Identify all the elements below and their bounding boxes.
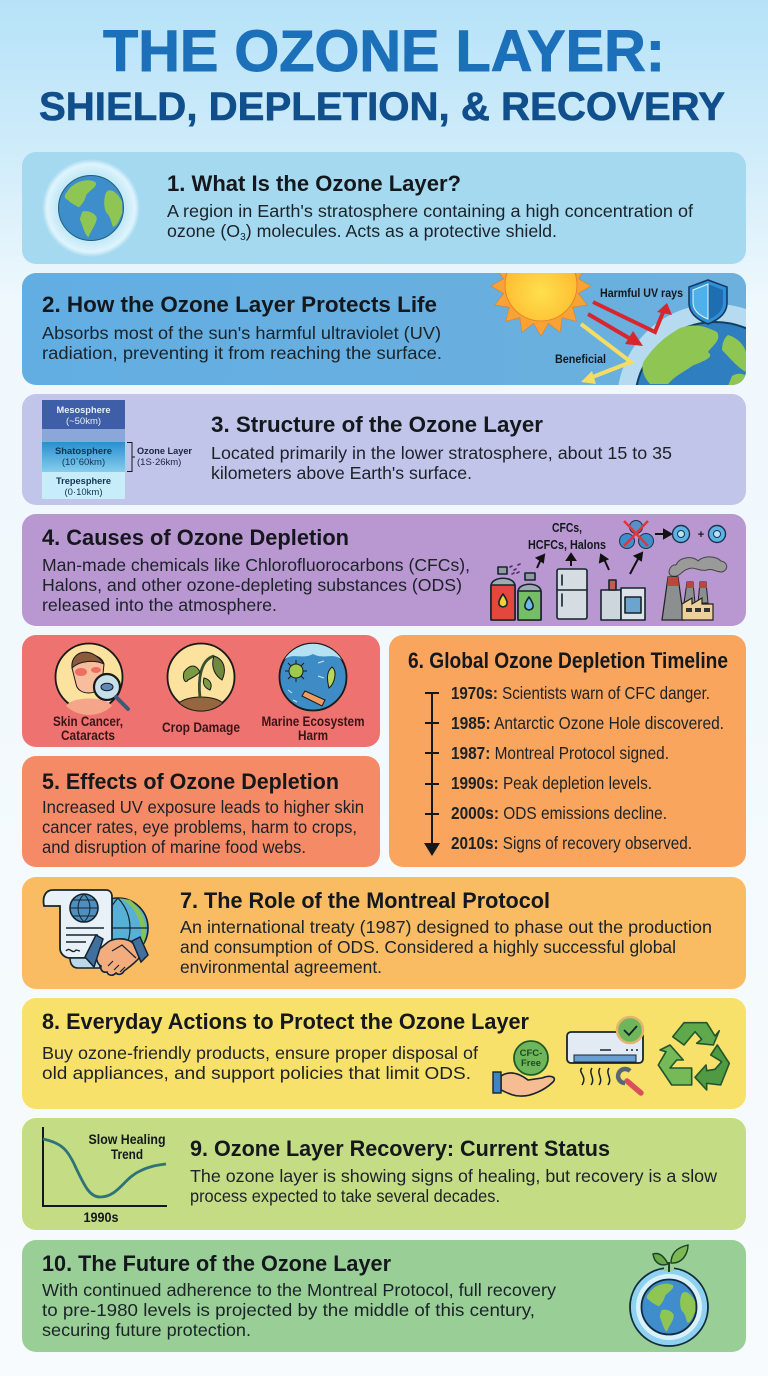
arrows: rising chemicals — [537, 530, 671, 574]
icon: hand holding CFC-free badge — [493, 1041, 554, 1096]
text block 5: and disruption of marine food webs. — [42, 837, 306, 857]
text block 7: environmental agreement. — [180, 957, 382, 977]
timeline entries: 1970s: Scientists warn of CFC danger. — [451, 683, 710, 703]
labels: effects: Skin Cancer, — [53, 714, 123, 729]
icon: shield — [689, 280, 727, 324]
icon: factory — [662, 557, 727, 620]
diagram: atmosphere layers: (0·10km) — [64, 487, 103, 498]
icon: arrowhead — [424, 843, 440, 856]
heading 9: 9. Ozone Layer Recovery: Current Status — [190, 1136, 610, 1161]
arrow: beneficial rays — [581, 324, 631, 384]
text block 4 — [42, 555, 470, 615]
icon: skin cancer — [56, 644, 128, 715]
diagram: atmosphere layers: Mesosphere — [56, 405, 110, 416]
icon: refrigerator — [557, 569, 587, 619]
text block 4: Man-made chemicals like Chlorofluorocarbons (CFCs), — [42, 555, 470, 575]
text block 5 — [42, 797, 364, 857]
chart: slow healing trend: 1990s — [84, 1210, 118, 1225]
text block 1: 3 — [240, 232, 246, 243]
heading 8: 8. Everyday Actions to Protect the Ozone Layer — [42, 1009, 529, 1034]
text block 10: With continued adherence to the Montreal Protocol, full recovery — [42, 1280, 556, 1300]
illustration: sun, earth, UV rays — [490, 273, 746, 385]
title: SHIELD, DEPLETION, & RECOVERY — [39, 85, 725, 129]
title — [39, 19, 725, 129]
icon: ozone molecule crossed out — [620, 520, 654, 548]
text block 1: ozone (O — [167, 221, 239, 241]
text block 4: released into the atmosphere. — [42, 595, 277, 615]
text block 7: An international treaty (1987) designed to phase out the production — [180, 917, 712, 937]
panel: 7 the role of the montreal protocol — [22, 877, 746, 989]
panel: 5 effects of ozone depletion — [22, 756, 380, 867]
diagram: atmosphere layers — [42, 400, 192, 499]
timeline entries: 2000s: ODS emissions decline. — [451, 803, 667, 823]
labels: effects — [53, 714, 364, 743]
arrow: harmful UV reflected — [593, 302, 672, 332]
icon: sun — [490, 273, 592, 336]
icon: hand holding CFC-free badge: Free — [521, 1058, 541, 1069]
panel: 1 what is the ozone layer — [22, 152, 746, 264]
heading 10: 10. The Future of the Ozone Layer — [42, 1251, 391, 1276]
heading 7: 7. The Role of the Montreal Protocol — [180, 888, 550, 913]
text block 3: kilometers above Earth's surface. — [211, 463, 472, 483]
text block 9: process expected to take several decades. — [190, 1186, 500, 1206]
timeline entries: 1987: Montreal Protocol signed. — [451, 743, 669, 763]
panel: 2 how the ozone layer protects life — [22, 273, 746, 385]
icon: recycle — [658, 1023, 729, 1090]
chart: slow healing trend: Trend — [111, 1147, 143, 1162]
timeline entries: 1990s: Peak depletion levels. — [451, 773, 652, 793]
text block 10: to pre-1980 levels is projected by the middle of this century, — [42, 1300, 535, 1320]
label: harmful UV rays: Harmful UV rays — [600, 286, 683, 300]
icon: air conditioner with wrench — [567, 1017, 643, 1093]
icon: oxygen molecules: + — [698, 529, 704, 541]
diagram: atmosphere layers: Trepesphere — [56, 476, 111, 487]
panel: 6 global ozone depletion timeline — [389, 635, 746, 867]
label: chemicals — [528, 520, 606, 552]
text block 1: A region in Earth's stratosphere containing a high concentration of — [167, 201, 693, 221]
timeline arrow — [425, 693, 439, 845]
title: THE OZONE LAYER: — [103, 19, 665, 84]
text block 5: Increased UV exposure leads to higher skin — [42, 797, 364, 817]
diagram: atmosphere layers: Shatosphere — [55, 446, 112, 457]
icon: earth with atmosphere — [618, 304, 746, 385]
text block 3: Located primarily in the lower stratosphere, about 15 to 35 — [211, 443, 672, 463]
icon: spray cans — [491, 564, 541, 620]
arrow: harmful UV absorbed — [588, 314, 643, 346]
text block 3 — [211, 443, 672, 483]
diagram: atmosphere layers: (1S·26km) — [137, 457, 181, 468]
diagram: atmosphere layers: (~50km) — [66, 416, 101, 427]
heading 5: 5. Effects of Ozone Depletion — [42, 769, 339, 794]
heading 1: 1. What Is the Ozone Layer? — [167, 171, 461, 196]
label: beneficial: Beneficial — [555, 352, 606, 366]
diagram: atmosphere layers: Ozone Layer — [137, 446, 192, 457]
icon: earth with halo — [42, 159, 140, 257]
icon: earth with sprout — [630, 1245, 708, 1346]
text block 10 — [42, 1280, 556, 1340]
text block 8: Buy ozone-friendly products, ensure proper disposal of — [42, 1043, 478, 1063]
panel: effect icons — [22, 635, 380, 747]
text block 2 — [42, 323, 442, 363]
timeline entries — [451, 683, 724, 853]
panel: 8 everyday actions — [22, 998, 746, 1109]
text block 9: The ozone layer is showing signs of healing, but recovery is a slow — [190, 1166, 717, 1186]
heading 2: 2. How the Ozone Layer Protects Life — [42, 292, 437, 317]
text block 9 — [190, 1166, 717, 1206]
text block 7: and consumption of ODS. Considered a highly successful global — [180, 937, 676, 957]
icon: marine ecosystem — [280, 644, 346, 710]
heading 3: 3. Structure of the Ozone Layer — [211, 412, 543, 437]
icon: oxygen molecules — [672, 526, 726, 542]
icon: hand holding CFC-free badge: CFC- — [520, 1048, 542, 1059]
panel: 3 structure of the ozone layer — [22, 394, 746, 505]
chart: slow healing trend: Slow Healing — [88, 1132, 166, 1147]
labels: effects: Crop Damage — [162, 720, 240, 735]
text block 10: securing future protection. — [42, 1320, 251, 1340]
panel: 4 causes of ozone depletion — [22, 514, 746, 626]
heading 4: 4. Causes of Ozone Depletion — [42, 525, 349, 550]
labels: effects: Harm — [298, 728, 328, 743]
timeline entries: 1985: Antarctic Ozone Hole discovered. — [451, 713, 724, 733]
labels: effects: Cataracts — [61, 728, 115, 743]
text block 7 — [180, 917, 712, 977]
text block 5: cancer rates, eye problems, harm to crops, — [42, 817, 357, 837]
text block 2: radiation, preventing it from reaching the surface. — [42, 343, 442, 363]
label: chemicals: CFCs, — [552, 520, 582, 535]
panel: 9 recovery status — [22, 1118, 746, 1230]
icon: treaty and handshake — [43, 890, 148, 975]
text block 1: ) molecules. Acts as a protective shield. — [246, 221, 557, 241]
text block 2: Absorbs most of the sun's harmful ultraviolet (UV) — [42, 323, 441, 343]
labels: effects: Marine Ecosystem — [262, 714, 364, 729]
panel: 10 future of the ozone layer — [22, 1240, 746, 1352]
label: chemicals: HCFCs, Halons — [528, 537, 606, 552]
text block 1 — [167, 201, 693, 243]
text block 8: old appliances, and support policies that limit ODS. — [42, 1063, 471, 1083]
chart: slow healing trend — [43, 1127, 167, 1225]
icon: kitchen stove — [601, 580, 645, 620]
timeline entries: 2010s: Signs of recovery observed. — [451, 833, 692, 853]
text block 8 — [42, 1043, 478, 1083]
text block 4: Halons, and other ozone-depleting substances (ODS) — [42, 575, 462, 595]
diagram: atmosphere layers: (10`60km) — [62, 457, 105, 468]
icon: crop damage — [168, 644, 234, 711]
